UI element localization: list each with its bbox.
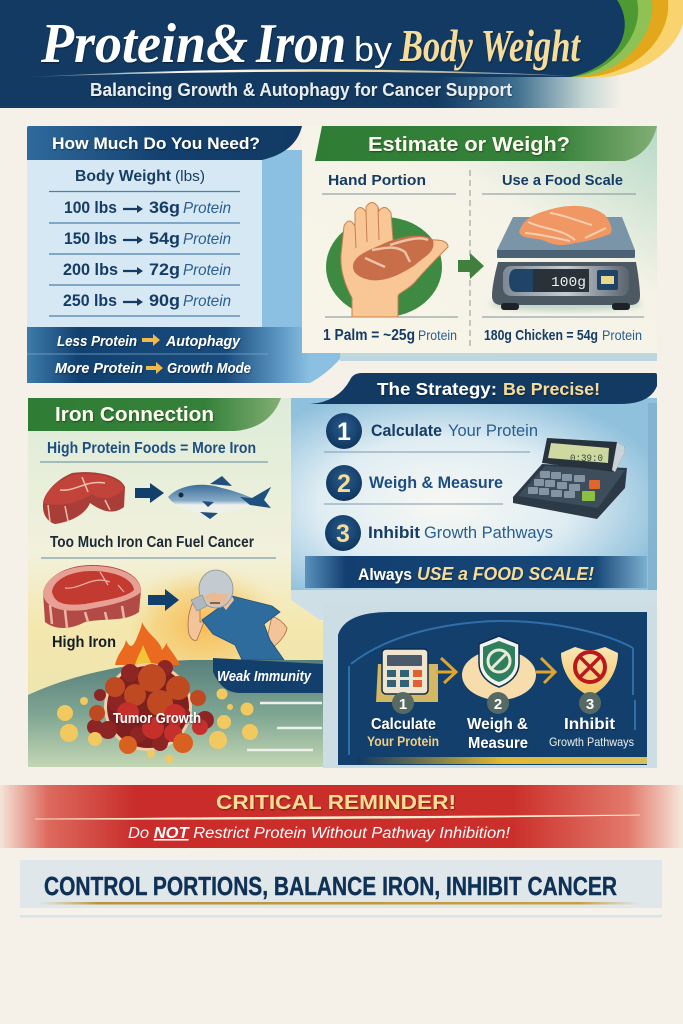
- title: Protein&: [40, 13, 248, 75]
- step 2: shield: [462, 636, 536, 752]
- icon: sick man: [188, 570, 287, 664]
- panel: estimate or weigh: [302, 126, 657, 353]
- step 3: 3: [336, 520, 350, 548]
- icon: kitchen scale with chicken: [490, 206, 642, 311]
- weight table: 100 lbs: [64, 199, 117, 217]
- panel: how much do you need: [27, 126, 657, 383]
- step 3: Growth Pathways: [424, 523, 553, 542]
- food scale column: 180g Chicken = 54g: [484, 327, 598, 344]
- step 1: calculator: 1: [399, 696, 407, 713]
- title swoosh: [30, 69, 572, 77]
- closing slogan: [20, 860, 662, 918]
- step 2: shield: 2: [494, 696, 502, 713]
- arrow: [135, 483, 164, 503]
- step 1: calculator: Calculate: [371, 716, 436, 733]
- step 3: inhibit shield: Growth Pathways: [549, 735, 634, 749]
- step 1: Your Protein: [448, 421, 538, 440]
- weight table: 200 lbs: [63, 261, 118, 279]
- panel heading: [315, 126, 657, 161]
- food scale column: Protein: [602, 327, 642, 343]
- weight table: [49, 168, 240, 316]
- icon: flames: [115, 622, 180, 665]
- icon: calculator: 0:39:0: [570, 454, 603, 465]
- panel heading: Be Precise!: [503, 379, 600, 399]
- face: [203, 592, 229, 606]
- panel heading: [27, 126, 302, 160]
- step 3: [325, 515, 553, 551]
- food scale column: Use a Food Scale: [502, 172, 623, 189]
- weight table: Body Weight: [75, 168, 172, 185]
- critical reminder banner: Do NOT Restrict Protein Without Pathway Inhibition!: [128, 825, 511, 842]
- weight table: 150 lbs: [64, 230, 117, 248]
- title: [40, 13, 581, 75]
- arrow: [458, 253, 484, 279]
- step 2: shield: Measure: [468, 735, 528, 752]
- shirt: [202, 596, 284, 660]
- hill: [28, 660, 323, 767]
- protein effects band: Growth Mode: [167, 361, 251, 377]
- step 1: [326, 413, 538, 449]
- step 3: inhibit shield: 3: [586, 696, 594, 713]
- food scale column: [482, 172, 644, 344]
- step 2: shield: Weigh &: [467, 716, 528, 733]
- hand portion column: Protein: [418, 327, 457, 343]
- weight table: Protein: [183, 262, 231, 279]
- step 3: inhibit shield: [549, 647, 634, 749]
- panel heading: [310, 373, 657, 404]
- icon: tumor cluster: [57, 660, 258, 763]
- panel: iron connection: [28, 398, 323, 767]
- weight table: Protein: [183, 200, 231, 217]
- icon: kitchen scale with chicken: 100g: [551, 275, 586, 291]
- icon: red glow: [120, 563, 290, 687]
- callout: weak immunity: [213, 658, 323, 693]
- step 1: Calculate: [371, 421, 442, 440]
- far arm: [246, 616, 287, 664]
- title: Iron: [255, 13, 346, 75]
- panel heading: Estimate or Weigh?: [368, 134, 570, 156]
- arrow: [148, 589, 179, 611]
- icon: raw steak: [43, 472, 125, 524]
- icon: palm holding meat: [326, 202, 448, 317]
- protein effects band: Autophagy: [165, 334, 241, 350]
- panel heading: How Much Do You Need?: [52, 134, 260, 153]
- weight table: (lbs): [175, 168, 205, 185]
- subheading: High Protein Foods = More Iron: [47, 440, 256, 457]
- weight table: 72g: [149, 261, 180, 279]
- weight table: Protein: [183, 293, 231, 310]
- arrow: [536, 658, 555, 683]
- panel: three-step summary: [323, 603, 657, 768]
- hand on head: [191, 595, 207, 611]
- callout: always use a food scale: Always: [358, 565, 412, 584]
- step 2: 2: [337, 470, 351, 498]
- header banner: [0, 0, 683, 108]
- callout: always use a food scale: [305, 556, 647, 588]
- hand portion column: Hand Portion: [328, 172, 426, 189]
- panel heading: The Strategy:: [377, 379, 497, 399]
- icon: calculator: [513, 438, 627, 519]
- hand portion column: 1 Palm = ~25g: [323, 327, 415, 344]
- panel heading: [28, 398, 281, 431]
- weight table: 54g: [149, 230, 180, 248]
- callout: weak immunity: Weak Immunity: [217, 669, 312, 685]
- protein effects band: [27, 327, 310, 383]
- callout: always use a food scale: USE a FOOD SCALE!: [417, 564, 594, 584]
- title: by: [354, 31, 392, 69]
- raised arm and hand: [188, 604, 204, 640]
- protein effects band: Less Protein: [57, 334, 137, 350]
- panel: the strategy: [291, 373, 657, 620]
- critical reminder banner: [0, 785, 683, 848]
- step 3: inhibit shield: Inhibit: [564, 716, 615, 733]
- label: High Iron: [52, 634, 116, 651]
- head: [199, 570, 233, 608]
- step 1: calculator: Your Protein: [367, 734, 439, 749]
- weight table: 36g: [149, 199, 180, 217]
- neck: [221, 594, 234, 610]
- panel heading: Iron Connection: [55, 404, 214, 426]
- protein effects band: More Protein: [55, 361, 143, 377]
- subtitle: Balancing Growth & Autophagy for Cancer Support: [90, 80, 512, 100]
- step 1: 1: [337, 418, 351, 446]
- step 2: [326, 465, 503, 501]
- weight table: 250 lbs: [63, 292, 117, 310]
- icon: high iron steak: [43, 565, 141, 628]
- hand portion column: [322, 172, 458, 344]
- warning text: Too Much Iron Can Fuel Cancer: [50, 534, 254, 551]
- title: Body Weight: [399, 20, 581, 71]
- label: Tumor Growth: [113, 711, 201, 727]
- step 2: Weigh & Measure: [369, 473, 503, 492]
- weight table: Protein: [183, 231, 231, 248]
- weight table: 90g: [149, 292, 180, 310]
- step 1: calculator: [367, 649, 439, 749]
- critical reminder banner: CRITICAL REMINDER!: [216, 792, 456, 814]
- step 3: Inhibit: [368, 523, 420, 542]
- arrow: [436, 658, 456, 683]
- icon: fish: [168, 476, 271, 519]
